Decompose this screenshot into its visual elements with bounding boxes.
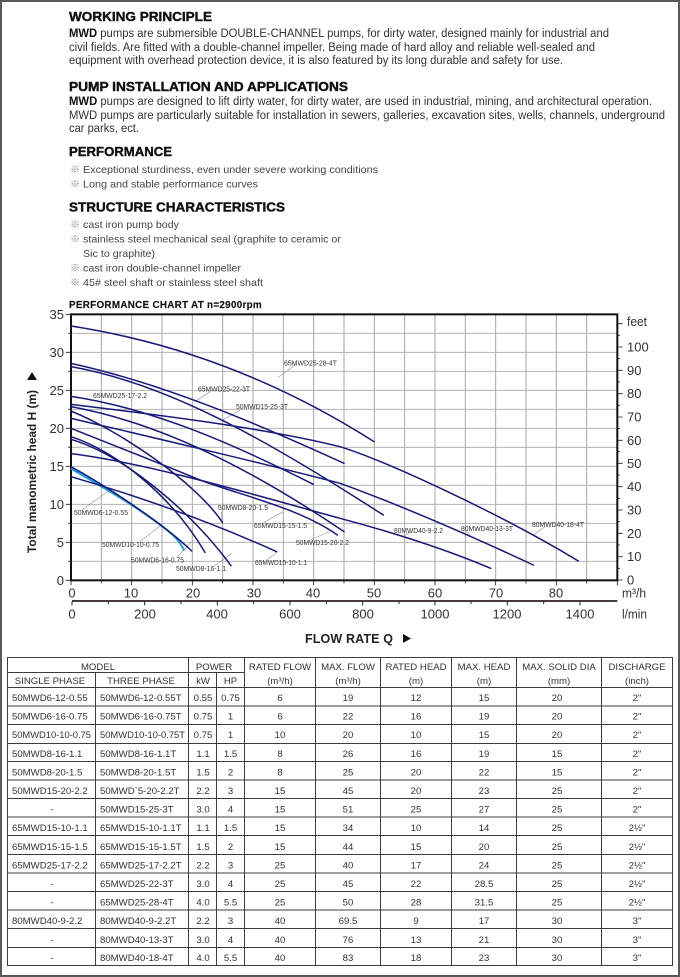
row: 50MWD15-20-2.2: 25 bbox=[552, 786, 562, 797]
row: 80MWD40-9-2.2: 30 bbox=[552, 916, 562, 927]
table header: THREE PHASE bbox=[107, 676, 175, 687]
row: 80MWD40-18-4T: 5.5 bbox=[224, 953, 237, 964]
table header: RATED FLOW bbox=[249, 662, 312, 673]
row: 50MWD15-20-2.2: 15 bbox=[275, 786, 285, 797]
row: 50MWD10-10-0.75: 15 bbox=[479, 730, 489, 741]
row: 65MWD15-15-1.5: 2 bbox=[228, 842, 233, 853]
curve labels: 50MWD10-10-0.75 bbox=[102, 542, 159, 549]
row: 50MWD10-10-0.75: 50MWD10-10-0.75T bbox=[100, 730, 185, 741]
row: 50MWD8-16-1.1: 8 bbox=[277, 749, 283, 760]
row: 80MWD40-9-2.2: 3 bbox=[228, 916, 233, 927]
row: 50MWD6-16-0.75: 50MWD6-16-0.75 bbox=[12, 712, 88, 723]
row: 65MWD25-22-3T: 25 bbox=[275, 879, 285, 890]
row: 50MWD6-16-0.75: 22 bbox=[343, 712, 353, 723]
y axis labels: head in metres: 10 bbox=[50, 497, 64, 512]
table header: MODEL bbox=[81, 662, 116, 673]
row: 65MWD15-10-1.1: 10 bbox=[411, 823, 421, 834]
row: 50MWD10-10-0.75: 2" bbox=[633, 730, 641, 741]
row: 50MWD6-12-0.55: 50MWD6-12-0.55T bbox=[100, 693, 182, 704]
row: 50MWD6-12-0.55: 6 bbox=[277, 693, 283, 704]
row: 65MWD15-10-1.1: 65MWD15-10-1.1T bbox=[100, 823, 182, 834]
curve labels: 80MWD40-18-4T bbox=[532, 522, 585, 529]
list: structure bbox=[70, 219, 342, 289]
x axis labels: l/min: 400 bbox=[206, 606, 228, 622]
text block: working principle: equipment with overhead protection device, it is also featured by its long durable and safety for use. bbox=[69, 55, 563, 67]
curve labels: 50MWD15-20-2.2 bbox=[296, 540, 349, 547]
row: 50MWD15-20-2.2: 50MWD15-20-2.2 bbox=[12, 786, 88, 797]
x axis labels: m3/h: m³/h bbox=[622, 586, 646, 600]
y axis labels: head in metres: 0 bbox=[57, 573, 64, 588]
row: 50MWD6-16-0.75: 20 bbox=[552, 712, 562, 723]
row: 80MWD40-13-3T: - bbox=[50, 935, 54, 946]
row: 80MWD40-18-4T: 4.0 bbox=[196, 953, 210, 964]
row: 80MWD40-9-2.2: 2.2 bbox=[196, 916, 210, 927]
row: 65MWD15-15-1.5: 65MWD15-15-1.5 bbox=[12, 842, 88, 853]
curve labels: 65MWD15-10-1.1 bbox=[255, 560, 307, 567]
list: structure: cast iron double-channel impeller bbox=[83, 262, 242, 274]
section: working principle bbox=[69, 9, 609, 67]
row: 50MWD15-20-2.2: 2.2 bbox=[196, 786, 210, 797]
right axis labels: feet: feet bbox=[627, 314, 647, 329]
row: 65MWD25-22-3T: 4 bbox=[228, 879, 234, 890]
table header: HP bbox=[224, 676, 237, 687]
row: 80MWD40-9-2.2 bbox=[12, 916, 641, 927]
section: structure characteristics bbox=[69, 200, 342, 289]
row: 50MWD8-20-1.5: 1.5 bbox=[196, 767, 210, 778]
row: 80MWD40-13-3T: 30 bbox=[552, 935, 562, 946]
row: 80MWD40-13-3T: 3.0 bbox=[196, 935, 210, 946]
row: 50MWD8-20-1.5: 15 bbox=[552, 767, 562, 778]
table header: POWER bbox=[196, 662, 232, 673]
row: 65MWD25-28-4T: - bbox=[50, 898, 54, 909]
list: structure: ※ bbox=[70, 264, 80, 274]
chart grid, frame and curves bbox=[66, 314, 623, 605]
row: 65MWD25-28-4T: 5.5 bbox=[224, 898, 237, 909]
row: 50MWD15-25-3T: 4 bbox=[228, 805, 234, 816]
row: 50MWD10-10-0.75: 50MWD10-10-0.75 bbox=[12, 730, 91, 741]
list: performance: Long and stable performance curves bbox=[83, 178, 258, 190]
right axis labels: feet: 50 bbox=[627, 456, 641, 471]
row: 80MWD40-13-3T: 80MWD40-13-3T bbox=[100, 935, 174, 946]
row: 80MWD40-18-4T bbox=[50, 953, 641, 964]
specification table bbox=[8, 658, 672, 966]
row: 50MWD15-25-3T: - bbox=[50, 805, 54, 816]
row: 65MWD25-17-2.2: 40 bbox=[343, 860, 353, 871]
table header: MAX. SOLID DIA bbox=[522, 662, 596, 673]
row: 65MWD25-28-4T: 31.5 bbox=[475, 898, 493, 909]
row: 50MWD15-20-2.2 bbox=[12, 786, 641, 797]
row: 50MWD10-10-0.75: 10 bbox=[411, 730, 421, 741]
curve: 50MWD10-10-0.75 bbox=[71, 469, 184, 551]
table grid bbox=[8, 658, 672, 966]
row: 65MWD15-15-1.5: 44 bbox=[343, 842, 354, 853]
row: 50MWD6-12-0.55: 19 bbox=[343, 693, 353, 704]
row: 50MWD6-16-0.75: 0.75 bbox=[194, 712, 212, 723]
x axis labels: m3/h: 80 bbox=[549, 586, 563, 600]
table header: RATED HEAD bbox=[385, 662, 447, 673]
row: 50MWD8-16-1.1: 2" bbox=[633, 749, 641, 760]
row: 50MWD15-25-3T: 27 bbox=[479, 805, 489, 816]
row: 65MWD15-10-1.1: 15 bbox=[275, 823, 285, 834]
row: 50MWD6-12-0.55: 50MWD6-12-0.55 bbox=[12, 693, 88, 704]
table header: (m) bbox=[477, 676, 491, 687]
row: 80MWD40-18-4T: 23 bbox=[479, 953, 489, 964]
row: 65MWD15-10-1.1: 14 bbox=[479, 823, 490, 834]
list: structure: cast iron pump body bbox=[83, 219, 180, 231]
row: 50MWD8-16-1.1: 26 bbox=[343, 749, 353, 760]
text block: pump installation bbox=[69, 96, 665, 135]
x axis labels: m3/h: 70 bbox=[489, 586, 503, 600]
x axis labels: m3/h: 10 bbox=[124, 586, 138, 600]
row: 50MWD15-25-3T bbox=[50, 805, 641, 816]
row: 50MWD15-25-3T: 50MWD15-25-3T bbox=[100, 805, 174, 816]
row: 65MWD25-17-2.2: 24 bbox=[479, 860, 490, 871]
row: 50MWD8-16-1.1: 15 bbox=[552, 749, 562, 760]
table header: SINGLE PHASE bbox=[15, 676, 85, 687]
row: 80MWD40-18-4T: 80MWD40-18-4T bbox=[100, 953, 174, 964]
row: 65MWD15-15-1.5: 1.5 bbox=[196, 842, 210, 853]
list: performance: ※ bbox=[70, 180, 80, 190]
y axis labels: head in metres: 20 bbox=[50, 421, 64, 436]
right axis labels: feet: 80 bbox=[627, 386, 641, 401]
row: 65MWD25-28-4T: 25 bbox=[552, 898, 562, 909]
row: 65MWD15-15-1.5: 25 bbox=[552, 842, 562, 853]
row: 65MWD15-10-1.1: 34 bbox=[343, 823, 354, 834]
y axis labels: head in metres: 35 bbox=[50, 307, 64, 322]
performance chart bbox=[25, 307, 649, 646]
row: 50MWD10-10-0.75: 20 bbox=[552, 730, 562, 741]
list: structure: ※ bbox=[70, 234, 80, 246]
row: 65MWD15-15-1.5: 20 bbox=[479, 842, 489, 853]
y axis labels: head in metres: 30 bbox=[50, 345, 64, 360]
text block: working principle bbox=[69, 28, 609, 67]
section: pump installation and applications bbox=[69, 79, 665, 135]
row: 65MWD25-28-4T: 65MWD25-28-4T bbox=[100, 898, 174, 909]
row: 50MWD15-25-3T: 2" bbox=[633, 805, 641, 816]
row: 50MWD15-25-3T: 25 bbox=[552, 805, 562, 816]
row: 50MWD15-20-2.2: 50MWD`5-20-2.2T bbox=[100, 786, 180, 797]
x axis labels: l/min: 0 bbox=[68, 606, 76, 622]
row: 50MWD10-10-0.75: 0.75 bbox=[194, 730, 212, 741]
row: 80MWD40-13-3T: 21 bbox=[479, 935, 489, 946]
row: 50MWD8-16-1.1: 50MWD8-16-1.1 bbox=[12, 749, 82, 760]
curve labels: 65MWD25-22-3T bbox=[198, 386, 251, 394]
row: 80MWD40-18-4T: 18 bbox=[411, 953, 421, 964]
row: 65MWD25-22-3T: 45 bbox=[343, 879, 353, 890]
y axis title: Total manometric head H (m) bbox=[25, 390, 39, 553]
right axis labels: feet bbox=[627, 314, 649, 588]
row: 65MWD25-22-3T bbox=[50, 879, 645, 890]
row: 65MWD25-22-3T: 2½" bbox=[629, 879, 645, 890]
row: 50MWD6-16-0.75: 1 bbox=[228, 712, 233, 723]
x axis labels: l/min: 600 bbox=[279, 606, 301, 622]
row: 65MWD25-17-2.2: 25 bbox=[275, 860, 285, 871]
x axis labels: m3/h: 60 bbox=[428, 586, 442, 600]
row: 65MWD15-15-1.5: 65MWD15-15-1.5T bbox=[100, 842, 182, 853]
row: 50MWD8-16-1.1: 50MWD8-16-1.1T bbox=[100, 749, 176, 760]
curve labels: 65MWD25-17-2.2 bbox=[93, 393, 147, 400]
chart title: PERFORMANCE CHART AT n=2900rpm bbox=[69, 299, 262, 311]
curve labels: 80MWD40-13-3T bbox=[461, 526, 514, 533]
x axis labels: m3/h: 30 bbox=[247, 586, 261, 600]
heading: working principle: WORKING PRINCIPLE bbox=[69, 9, 212, 24]
y axis labels: head in metres bbox=[50, 307, 64, 588]
right axis labels: feet: 20 bbox=[627, 526, 641, 541]
text block: pump installation: MWD pumps are particularly suitable for installation in sewers, galleries, excavation sites, wells, channels, underground bbox=[69, 110, 665, 122]
row: 65MWD25-22-3T: 28.5 bbox=[475, 879, 493, 890]
heading: structure characteristics: STRUCTURE CHARACTERISTICS bbox=[69, 200, 285, 214]
row: 80MWD40-13-3T: 40 bbox=[275, 935, 285, 946]
row: 65MWD25-17-2.2: 2.2 bbox=[196, 860, 210, 871]
list: structure: ※ bbox=[70, 278, 80, 289]
right axis labels: feet: 90 bbox=[627, 363, 641, 378]
row: 50MWD10-10-0.75: 20 bbox=[343, 730, 353, 741]
row: 50MWD6-16-0.75: 19 bbox=[479, 712, 489, 723]
x axis labels: l/min bbox=[68, 606, 647, 622]
right axis labels: feet: 40 bbox=[627, 479, 641, 494]
row: 65MWD25-22-3T: 22 bbox=[411, 879, 421, 890]
row: 50MWD10-10-0.75: 10 bbox=[275, 730, 285, 741]
row: 50MWD8-16-1.1: 1.5 bbox=[224, 749, 237, 760]
row: 50MWD8-16-1.1: 19 bbox=[479, 749, 489, 760]
row: 65MWD25-28-4T: 25 bbox=[275, 898, 285, 909]
row: 50MWD15-25-3T: 15 bbox=[275, 805, 285, 816]
x axis title: FLOW RATE Q bbox=[305, 632, 393, 646]
row: 50MWD8-20-1.5: 2" bbox=[633, 767, 641, 778]
row: 65MWD15-10-1.1: 2½" bbox=[629, 823, 645, 834]
list: performance: ※ bbox=[70, 165, 80, 176]
curves: pump performance lines bbox=[71, 326, 578, 568]
table header: (m³/h) bbox=[267, 676, 293, 687]
row: 50MWD10-10-0.75: 1 bbox=[228, 730, 233, 741]
y axis labels: head in metres: 25 bbox=[50, 383, 64, 398]
table header: (mm) bbox=[548, 676, 570, 687]
x axis labels: l/min: 1400 bbox=[566, 606, 594, 622]
row: 80MWD40-18-4T: - bbox=[50, 953, 54, 964]
row: 50MWD15-20-2.2: 3 bbox=[228, 786, 233, 797]
row: 50MWD15-20-2.2: 23 bbox=[479, 786, 489, 797]
row: 65MWD25-28-4T: 50 bbox=[343, 898, 353, 909]
table header bbox=[15, 662, 666, 687]
row: 80MWD40-9-2.2: 80MWD40-9-2.2 bbox=[12, 916, 82, 927]
right axis labels: feet: 60 bbox=[627, 433, 641, 448]
heading: performance: PERFORMANCE bbox=[69, 144, 172, 159]
row: 50MWD6-16-0.75: 6 bbox=[277, 712, 283, 723]
row: 50MWD15-25-3T: 3.0 bbox=[196, 805, 210, 816]
right axis labels: feet: 10 bbox=[627, 549, 641, 564]
row: 65MWD25-17-2.2: 65MWD25-17-2.2 bbox=[12, 860, 88, 871]
right axis labels: feet: 30 bbox=[627, 502, 641, 518]
row: 65MWD15-10-1.1: 65MWD15-10-1.1 bbox=[12, 823, 88, 834]
row: 50MWD8-20-1.5: 20 bbox=[411, 767, 421, 778]
row: 50MWD10-10-0.75 bbox=[12, 730, 641, 741]
x axis labels: l/min: 800 bbox=[352, 606, 374, 622]
row: 65MWD25-17-2.2: 25 bbox=[552, 860, 562, 871]
section: performance bbox=[69, 144, 378, 190]
row: 65MWD25-17-2.2: 65MWD25-17-2.2T bbox=[100, 860, 182, 871]
curve labels: 50MWD6-16-0.75 bbox=[131, 558, 184, 564]
table header: MAX. FLOW bbox=[321, 662, 376, 673]
row: 50MWD15-20-2.2: 2" bbox=[633, 786, 641, 797]
row: 65MWD15-10-1.1: 25 bbox=[552, 823, 562, 834]
row: 65MWD15-15-1.5: 15 bbox=[275, 842, 285, 853]
row: 80MWD40-18-4T: 3" bbox=[633, 953, 641, 964]
row: 80MWD40-18-4T: 40 bbox=[275, 953, 285, 964]
row: 65MWD25-17-2.2 bbox=[12, 860, 645, 871]
x axis labels: m3/h: 0 bbox=[68, 586, 76, 600]
list: structure: 45# steel shaft or stainless steel shaft bbox=[83, 277, 263, 289]
x axis labels: l/min: 1000 bbox=[421, 606, 449, 622]
text block: working principle: MWD pumps are submersible DOUBLE-CHANNEL pumps, for dirty water, designed mainly for industrial and bbox=[69, 28, 609, 40]
row: 80MWD40-13-3T: 3" bbox=[633, 935, 641, 946]
x axis labels: m3/h: 50 bbox=[367, 586, 381, 600]
row: 50MWD8-16-1.1: 1.1 bbox=[196, 749, 210, 760]
curve labels: 65MWD25-28-4T bbox=[284, 360, 338, 368]
row: 50MWD8-16-1.1 bbox=[12, 749, 641, 760]
row: 80MWD40-9-2.2: 9 bbox=[413, 916, 419, 927]
row: 80MWD40-9-2.2: 40 bbox=[275, 916, 285, 927]
right axis labels: feet: 70 bbox=[627, 410, 641, 424]
row: 65MWD25-22-3T: - bbox=[50, 879, 54, 890]
row: 65MWD15-10-1.1: 1.5 bbox=[224, 823, 237, 834]
text block: pump installation: MWD pumps are designed to lift dirty water, for dirty water, are used in industrial, mining, and architectural operation. bbox=[69, 96, 652, 108]
text block: pump installation: car parks, ect. bbox=[69, 123, 139, 135]
row: 65MWD25-28-4T bbox=[50, 898, 645, 909]
row: 50MWD8-20-1.5 bbox=[12, 767, 641, 778]
curve labels: 50MWD15-25-3T bbox=[236, 404, 289, 411]
row: 50MWD15-20-2.2: 45 bbox=[343, 786, 353, 797]
row: 65MWD15-10-1.1 bbox=[12, 823, 645, 834]
row: 65MWD25-28-4T: 28 bbox=[411, 898, 421, 909]
x axis labels: m3/h: 40 bbox=[306, 586, 320, 600]
table header: kW bbox=[196, 676, 211, 687]
row: 80MWD40-13-3T: 13 bbox=[411, 935, 421, 946]
text block: working principle: civil fields. Are fitted with a double-channel impeller. Being made of hard alloy and reliable well-sealed and bbox=[69, 42, 595, 54]
row: 50MWD6-12-0.55 bbox=[12, 693, 641, 704]
curve labels: 50MWD6-12-0.55 bbox=[74, 510, 128, 517]
curve labels: 50MWD8-16-1.1 bbox=[176, 566, 226, 573]
right axis labels: feet: 100 bbox=[627, 340, 649, 354]
row: 50MWD8-20-1.5: 2 bbox=[228, 767, 233, 778]
list: structure: stainless steel mechanical seal (graphite to ceramic or bbox=[83, 234, 342, 246]
curve labels: 50MWD8-20-1.5 bbox=[218, 505, 268, 512]
table header: (inch) bbox=[625, 676, 649, 687]
row: 65MWD25-28-4T: 4.0 bbox=[196, 898, 210, 909]
row: 65MWD25-17-2.2: 3 bbox=[228, 860, 233, 871]
list: structure: Sic to graphite) bbox=[83, 248, 155, 260]
right axis labels: feet: 0 bbox=[627, 572, 634, 588]
row: 50MWD15-25-3T: 51 bbox=[343, 805, 353, 816]
row: 80MWD40-13-3T: 76 bbox=[343, 935, 353, 946]
row: 80MWD40-9-2.2: 17 bbox=[479, 916, 489, 927]
row: 50MWD6-12-0.55: 12 bbox=[411, 693, 421, 704]
x axis labels: m3/h: 20 bbox=[186, 586, 200, 600]
row: 50MWD8-20-1.5: 50MWD8-20-1.5T bbox=[100, 767, 176, 778]
x axis labels: l/min: 200 bbox=[134, 606, 156, 622]
row: 50MWD8-16-1.1: 16 bbox=[411, 749, 421, 760]
row: 65MWD15-15-1.5: 2½" bbox=[629, 842, 645, 853]
row: 50MWD8-20-1.5: 8 bbox=[277, 767, 283, 778]
row: 50MWD8-20-1.5: 50MWD8-20-1.5 bbox=[12, 767, 82, 778]
x axis labels: l/min: l/min bbox=[622, 606, 647, 622]
y axis labels: head in metres: 15 bbox=[50, 459, 64, 474]
row: 65MWD15-15-1.5 bbox=[12, 842, 645, 853]
row: 80MWD40-13-3T: 4 bbox=[228, 935, 234, 946]
table header: DISCHARGE bbox=[608, 662, 666, 673]
heading: pump installation: PUMP INSTALLATION AND APPLICATIONS bbox=[69, 79, 348, 94]
row: 65MWD25-22-3T: 25 bbox=[552, 879, 562, 890]
x axis labels: m3/h bbox=[68, 586, 646, 600]
list: performance bbox=[70, 164, 378, 190]
row: 65MWD15-10-1.1: 1.1 bbox=[196, 823, 210, 834]
x axis labels: l/min: 1200 bbox=[493, 606, 521, 622]
row: 50MWD6-16-0.75: 2" bbox=[633, 712, 641, 723]
row: 80MWD40-18-4T: 83 bbox=[343, 953, 353, 964]
table header: MAX. HEAD bbox=[458, 662, 510, 673]
row: 50MWD6-16-0.75 bbox=[12, 712, 641, 723]
row: 65MWD25-28-4T: 2½" bbox=[629, 898, 645, 909]
row: 50MWD8-20-1.5: 22 bbox=[479, 767, 489, 778]
curve labels: 80MWD40-9-2.2 bbox=[394, 528, 443, 535]
row: 65MWD25-22-3T: 3.0 bbox=[196, 879, 210, 890]
row: 65MWD25-17-2.2: 17 bbox=[411, 860, 421, 871]
row: 65MWD15-15-1.5: 15 bbox=[411, 842, 421, 853]
curve labels: 65MWD15-15-1.5 bbox=[254, 523, 307, 530]
row: 50MWD6-12-0.55: 20 bbox=[552, 693, 562, 704]
row: 50MWD15-25-3T: 25 bbox=[411, 805, 421, 816]
row: 80MWD40-18-4T: 30 bbox=[552, 953, 562, 964]
row: 50MWD6-12-0.55: 0.55 bbox=[194, 693, 212, 704]
row: 80MWD40-13-3T bbox=[50, 935, 641, 946]
table header: (m) bbox=[409, 676, 423, 687]
list: structure: ※ bbox=[70, 220, 80, 231]
row: 80MWD40-9-2.2: 80MWD40-9-2.2T bbox=[100, 916, 176, 927]
row: 50MWD6-12-0.55: 2" bbox=[633, 693, 641, 704]
row: 80MWD40-9-2.2: 69.5 bbox=[339, 916, 357, 927]
curve labels bbox=[74, 360, 585, 573]
row: 50MWD8-20-1.5: 25 bbox=[343, 767, 353, 778]
row: 50MWD6-12-0.55: 15 bbox=[479, 693, 489, 704]
row: 80MWD40-9-2.2: 3" bbox=[633, 916, 641, 927]
row: 50MWD15-20-2.2: 20 bbox=[411, 786, 421, 797]
row: 65MWD25-17-2.2: 2½" bbox=[629, 860, 645, 871]
row: 50MWD6-16-0.75: 50MWD6-16-0.75T bbox=[100, 712, 182, 723]
row: 50MWD6-12-0.55: 0.75 bbox=[221, 693, 240, 704]
y axis labels: head in metres: 5 bbox=[57, 535, 64, 550]
list: performance: Exceptional sturdiness, even under severe working conditions bbox=[83, 164, 378, 176]
table header: (m³/h) bbox=[335, 676, 361, 687]
row: 65MWD25-22-3T: 65MWD25-22-3T bbox=[100, 879, 174, 890]
row: 50MWD6-16-0.75: 16 bbox=[411, 712, 421, 723]
